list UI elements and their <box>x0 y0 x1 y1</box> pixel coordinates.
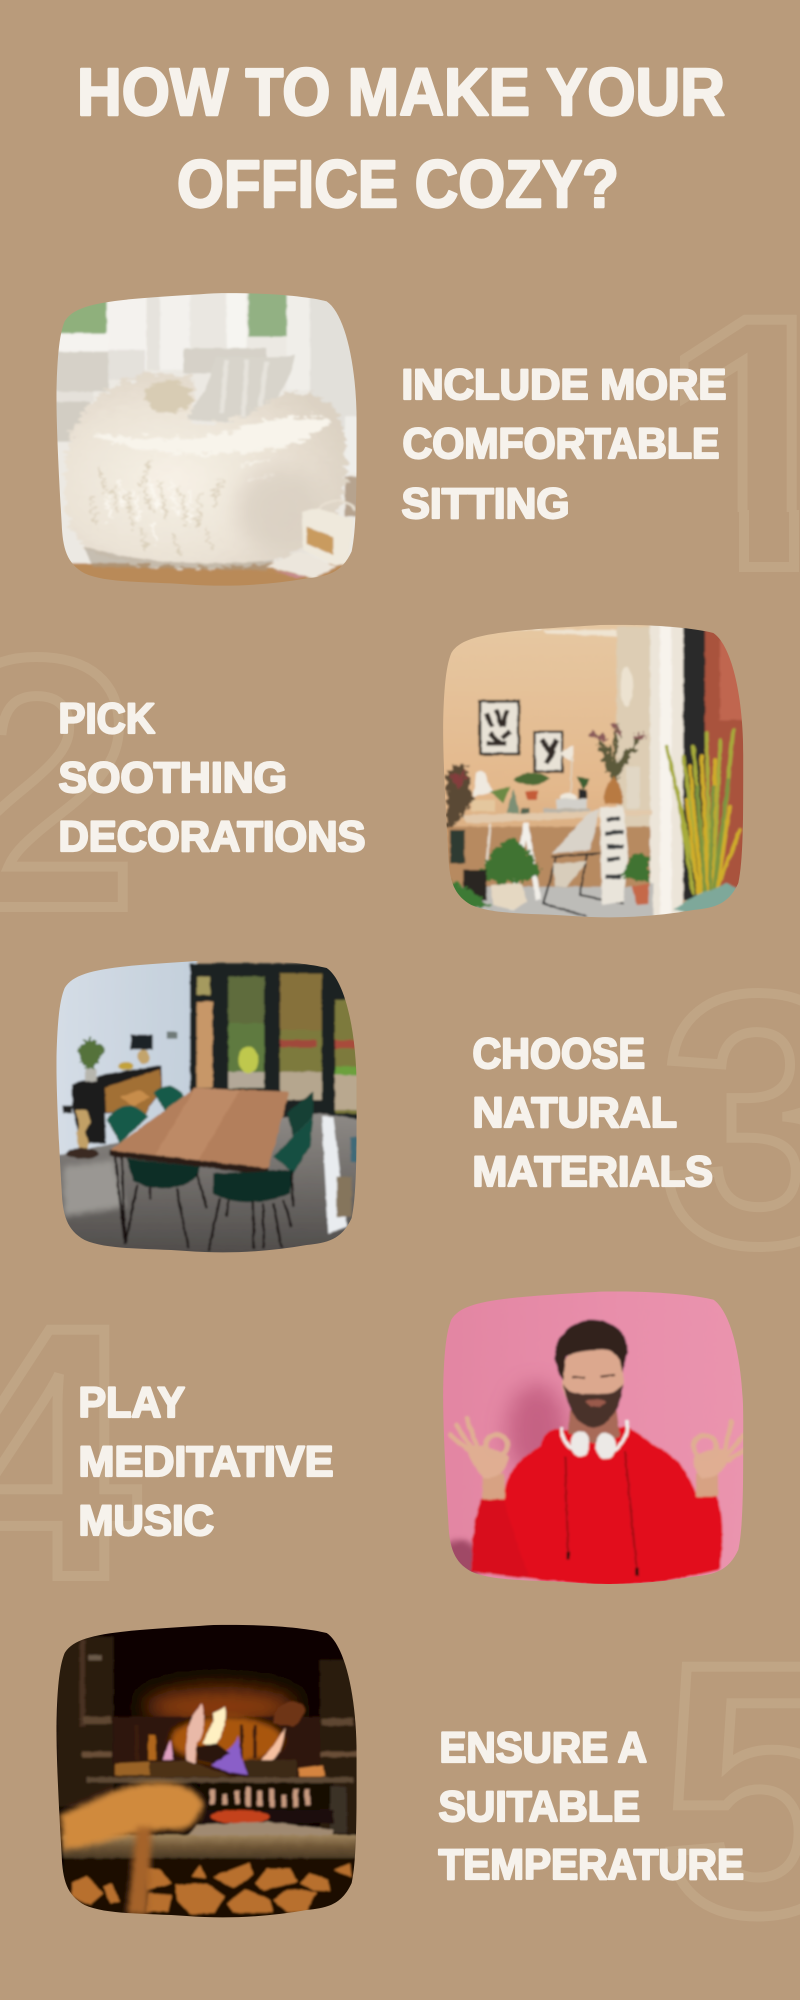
legs <box>115 1157 293 1252</box>
photo: fireplace with logs <box>56 1624 357 1918</box>
floor fern <box>480 837 542 883</box>
lamp <box>559 745 573 762</box>
text: ensure a suitable temperature: SUITABLE <box>438 1783 640 1831</box>
firebox back <box>113 1717 320 1778</box>
grate <box>87 1777 353 1783</box>
table top <box>110 1088 289 1168</box>
desk <box>462 810 652 823</box>
floor <box>60 1112 356 1252</box>
plant and lamp <box>78 1040 104 1070</box>
text: pick soothing decorations <box>58 695 366 861</box>
text: pick soothing decorations: PICK <box>58 695 155 743</box>
photo: wooden dining table with green chairs <box>56 961 357 1252</box>
grass plant <box>667 730 740 893</box>
flames <box>186 1703 204 1763</box>
hearth slab <box>63 1835 357 1858</box>
title: HOW TO MAKE YOUR <box>77 55 725 130</box>
plants on desk <box>590 723 645 780</box>
text: choose natural materials <box>472 1030 713 1196</box>
left hand <box>483 1473 505 1499</box>
back chairs <box>107 1106 148 1143</box>
text: choose natural materials: CHOOSE <box>472 1030 645 1078</box>
front chairs <box>127 1158 200 1188</box>
beanbag <box>65 373 346 568</box>
radio <box>342 500 356 512</box>
headphones <box>561 1420 627 1453</box>
text: ensure a suitable temperature <box>438 1724 744 1889</box>
neck and head <box>568 1410 620 1443</box>
text: play meditative music: PLAY <box>78 1379 185 1427</box>
text: play meditative music: MUSIC <box>78 1497 214 1545</box>
logs <box>115 1761 233 1777</box>
magazines <box>266 562 337 578</box>
left plant <box>447 764 473 827</box>
text: play meditative music <box>78 1379 334 1545</box>
beard <box>563 1383 623 1427</box>
text: choose natural materials: NATURAL <box>472 1089 677 1137</box>
photo: man meditating in red hoodie with headphones <box>443 1292 744 1584</box>
text: pick soothing decorations: DECORATIONS <box>58 813 366 861</box>
text: ensure a suitable temperature: TEMPERATURE <box>438 1841 744 1889</box>
numeral 1 <box>680 315 799 572</box>
text: choose natural materials: MATERIALS <box>472 1148 713 1196</box>
title: OFFICE COZY? <box>177 147 619 222</box>
chair and throw <box>552 808 600 853</box>
text: include more comfortable sitting <box>402 361 726 528</box>
text: pick soothing decorations: SOOTHING <box>58 754 287 802</box>
floor pot <box>623 853 650 883</box>
pillow <box>183 355 295 423</box>
embers and ash <box>200 1810 333 1823</box>
text: include more comfortable sitting: SITTING <box>402 480 570 528</box>
stacked logs <box>72 1863 352 1914</box>
hair <box>555 1320 628 1380</box>
photo: fluffy bean bag by a window <box>50 287 367 593</box>
text: ensure a suitable temperature: ENSURE A <box>440 1724 647 1772</box>
text: include more comfortable sitting: COMFORTABLE <box>402 420 720 468</box>
text: include more comfortable sitting: INCLUDE MORE <box>402 361 726 409</box>
title <box>77 55 725 222</box>
wall art <box>479 700 520 755</box>
sideboard <box>72 1065 162 1143</box>
text: play meditative music: MEDITATIVE <box>78 1438 334 1486</box>
right hand <box>696 1473 718 1497</box>
hoodie <box>472 1427 722 1587</box>
foreground blurred tool <box>60 1782 204 1915</box>
ornament <box>75 1110 91 1152</box>
photo: desk with plants and decorations <box>433 620 748 927</box>
